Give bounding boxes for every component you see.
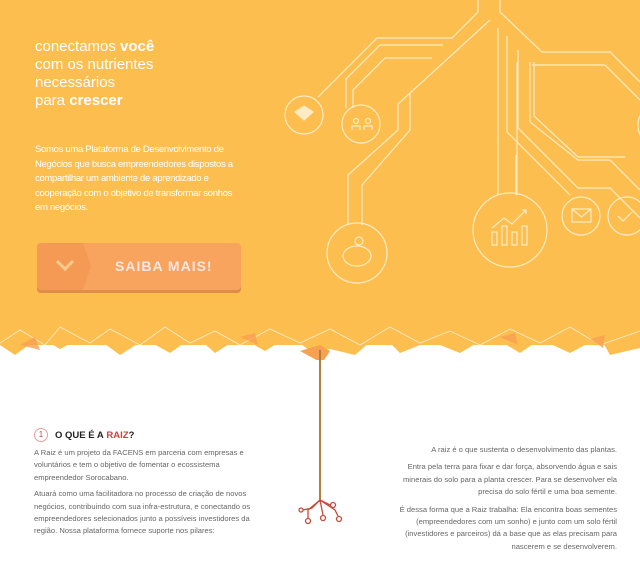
jagged edge [0, 326, 640, 360]
right text block [400, 445, 617, 551]
icon: handshake circle [285, 96, 323, 134]
title: para crescer [35, 92, 123, 109]
icon: people circle [342, 105, 380, 143]
right text block: É dessa forma que a Raiz trabalha: Ela encontra boas sementes (empreendedores com um sonho) e junto com um solo fértil (investidores e parceiros) dá a base que as elas precisam para nascerem e se desenvolverem. [400, 505, 617, 551]
heading: o que é a raiz: O QUE É A ? [55, 430, 134, 440]
hero background [0, 0, 640, 345]
heading: o que é a raiz [34, 428, 134, 442]
icon: piggy bank circle [327, 223, 387, 283]
right text block: A raiz é o que sustenta o desenvolvimento das plantas. [431, 445, 617, 454]
icon: growth chart circle [473, 193, 547, 267]
title: conectamos você [35, 38, 154, 55]
icon: chevron [56, 260, 74, 271]
circuit illustration [284, 0, 640, 284]
number badge [34, 428, 48, 442]
icon: roots [299, 500, 342, 524]
title: necessários [35, 74, 115, 91]
title [35, 38, 154, 109]
icon: check circle [608, 197, 640, 235]
icon: envelope circle [562, 197, 600, 235]
root line [298, 350, 342, 524]
left text block [34, 448, 250, 535]
button: saiba mais [37, 243, 241, 290]
intro paragraph: Somos uma Plataforma de Desenvolvimento de Negócios que busca empreendedores dispostos a compartilhar um ambiente de aprendizado e cooperação com o objetivo de transformar sonhos em negócios. [35, 144, 233, 213]
heading: o que é a raiz: RAIZ [106, 430, 129, 440]
title: com os nutrientes [35, 56, 153, 73]
number badge: 1 [39, 430, 43, 439]
right text block: Entra pela terra para fixar e dar força, absorvendo água e sais minerais do solo para a planta crescer. Para se desenvolver ela precisa do solo fértil e uma boa semente. [403, 462, 617, 496]
left text block: A Raiz é um projeto da FACENS em parceria com empresas e voluntários e tem o objetivo de fomentar o ecossistema empreendedor Sorocabano. [34, 448, 244, 482]
left text block: Atuará como uma facilitadora no processo de criação de novos negócios, contribuindo com sua infra-estrutura, e conectando os empreendedores selecionados junto a possíveis investidores da região. Nossa plataforma fornece suporte nos pilares: [34, 489, 250, 535]
button: saiba mais: SAIBA MAIS! [115, 258, 213, 274]
